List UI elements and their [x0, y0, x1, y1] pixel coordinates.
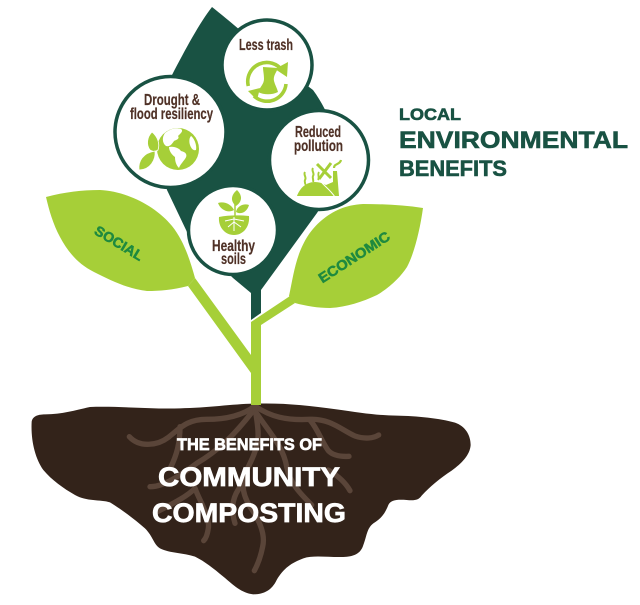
heading: local environmental benefits: ENVIRONMENTAL [399, 127, 628, 154]
heading: local environmental benefits: LOCAL [399, 105, 461, 124]
heading: local environmental benefits [399, 105, 628, 181]
label: healthy soils [212, 238, 255, 268]
stem and branches [188, 278, 295, 405]
label: less trash: Less trash [239, 37, 293, 54]
heading: local environmental benefits: BENEFITS [399, 156, 507, 181]
circle: healthy soils [188, 186, 278, 274]
label: healthy soils: soils [221, 251, 246, 268]
soil mound [32, 403, 471, 594]
title: the benefits of community composting [152, 435, 346, 528]
label: reduced pollution: pollution [294, 138, 343, 155]
icon: landfill with factory [297, 160, 341, 197]
circle: reduced pollution [270, 110, 368, 210]
label: drought and flood: Drought & [144, 92, 200, 109]
circle: less trash [222, 20, 312, 110]
label: healthy soils: Healthy [212, 238, 255, 255]
label: reduced pollution [294, 124, 343, 155]
dark green leaf: environmental [162, 7, 338, 320]
label: economic: ECONOMIC [315, 228, 393, 286]
label: drought and flood: flood resiliency [130, 106, 213, 123]
title: the benefits of community composting: COMPOSTING [152, 498, 346, 528]
circle: drought and flood resiliency [115, 76, 226, 188]
roots [129, 406, 379, 571]
icon: plant with roots [218, 190, 249, 235]
title: the benefits of community composting: THE BENEFITS OF [177, 435, 322, 454]
label: reduced pollution: Reduced [295, 124, 341, 141]
icon: recycled apple core [248, 62, 288, 101]
icon: globe with leaves [139, 128, 199, 170]
leaf: social [46, 190, 195, 291]
label: social: SOCIAL [92, 222, 147, 264]
label: drought and flood [130, 92, 213, 123]
leaf: economic [289, 204, 423, 308]
title: the benefits of community composting: COMMUNITY [158, 462, 340, 492]
